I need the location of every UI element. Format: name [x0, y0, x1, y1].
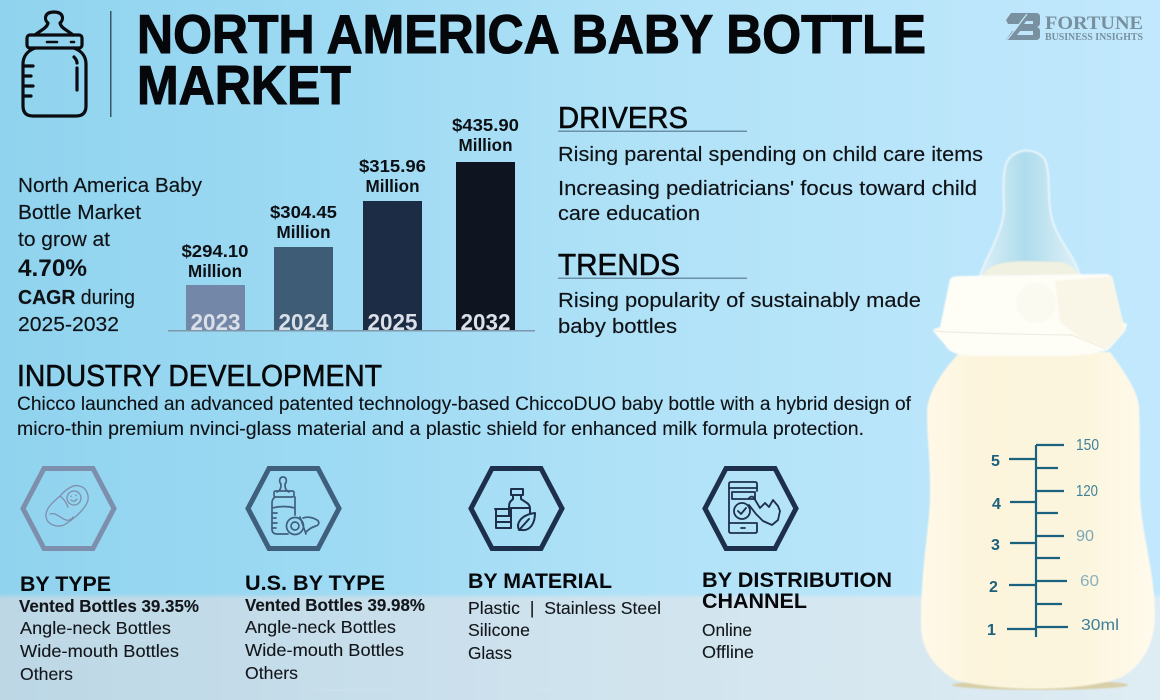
- segment list: [702, 620, 754, 662]
- bar 2025: [359, 156, 426, 335]
- segment list: Glass: [468, 643, 512, 663]
- text block: market summary: CAGR during: [18, 287, 135, 309]
- heading: [702, 569, 892, 613]
- bar 2023: Million: [188, 261, 242, 281]
- text block: market summary: Bottle Market: [18, 202, 141, 224]
- measurement scale: 60: [1080, 573, 1099, 590]
- nipple: [980, 151, 1080, 276]
- panel: drivers: Increasing pediatricians' focus toward child: [558, 178, 977, 200]
- segment list: Vented Bottles 39.35%: [19, 596, 199, 616]
- measurement scale: 1: [987, 622, 996, 639]
- panel: drivers: care education: [558, 203, 700, 225]
- panel: drivers: [558, 100, 983, 225]
- text block: market summary: [18, 175, 202, 336]
- bottle shadow: [952, 680, 1128, 690]
- bar 2023: [182, 241, 249, 335]
- heading: BY TYPE: [20, 573, 111, 596]
- icon: swaddled baby hexagon: [23, 468, 114, 548]
- bar 2024: [270, 202, 337, 335]
- bar 2023: 2023: [190, 309, 240, 335]
- bottle body: [921, 352, 1155, 689]
- text block: market summary: 4.70%: [18, 255, 87, 282]
- measurement scale: 150: [1076, 437, 1099, 454]
- panel: industry development: INDUSTRY DEVELOPMENT: [17, 358, 382, 393]
- icon: materials hexagon: [471, 468, 562, 548]
- measurement scale: 4: [992, 496, 1001, 513]
- segment list: Wide-mouth Bottles: [20, 641, 179, 661]
- segment list: [245, 595, 425, 683]
- bar 2032: $435.90: [452, 115, 519, 135]
- segment list: Wide-mouth Bottles: [245, 640, 404, 660]
- measurement scale: [987, 437, 1119, 639]
- divider: [110, 11, 112, 117]
- bar 2032: [452, 115, 519, 335]
- bar 2025: 2025: [368, 309, 418, 335]
- panel: industry development: [17, 358, 912, 440]
- icon: phone ordering hexagon: [705, 468, 796, 548]
- text block: market summary: 2025-2032: [18, 314, 119, 336]
- bar 2032: Million: [458, 135, 512, 155]
- panel: industry development: micro-thin premium nvinci-glass material and a plastic shield for enhanced milk formula protection.: [17, 419, 864, 440]
- bottle cap: [933, 274, 1127, 356]
- icon: baby bottle: [23, 12, 86, 116]
- measurement scale: 3: [991, 537, 1000, 554]
- measurement scale: 120: [1076, 483, 1098, 500]
- text block: market summary: North America Baby: [18, 175, 202, 197]
- bar 2032: 2032: [460, 309, 510, 335]
- panel: trends: Rising popularity of sustainably made: [558, 290, 921, 312]
- panel: by type: [19, 468, 199, 684]
- bar chart: [168, 115, 535, 335]
- segment list: Plastic | Stainless Steel: [468, 598, 661, 618]
- segment list: Angle-neck Bottles: [20, 618, 171, 638]
- panel: trends: baby bottles: [558, 316, 677, 338]
- panel: trends: [558, 247, 921, 338]
- panel: trends: TRENDS: [558, 247, 680, 282]
- panel: industry development: Chicco launched an advanced patented technology-based ChiccoDUO baby bottle with a hybrid design of: [17, 394, 912, 415]
- segment list: Angle-neck Bottles: [245, 617, 396, 637]
- heading: BY DISTRIBUTION: [702, 569, 892, 592]
- bar 2023: $294.10: [182, 241, 249, 261]
- measurement scale: 30ml: [1081, 617, 1119, 634]
- title: NORTH AMERICA BABY BOTTLE: [137, 3, 926, 65]
- segment list: Others: [20, 664, 73, 684]
- segment list: Others: [245, 663, 298, 683]
- logo: Fortune Business Insights: [1006, 13, 1143, 43]
- measurement scale: 90: [1076, 528, 1094, 545]
- panel: by distribution channel: [702, 468, 892, 662]
- segment list: Silicone: [468, 620, 530, 640]
- heading: BY MATERIAL: [468, 570, 612, 593]
- icon: bottle and pacifier hexagon: [248, 468, 339, 548]
- segment list: [19, 596, 199, 684]
- heading: U.S. BY TYPE: [245, 572, 385, 595]
- logo: Fortune Business Insights: BUSINESS INSIGHTS: [1045, 32, 1143, 43]
- bar 2024: 2024: [278, 309, 329, 335]
- segment list: Vented Bottles 39.98%: [245, 595, 425, 615]
- bar 2025: Million: [366, 176, 420, 196]
- panel: U.S. by type: [245, 468, 425, 683]
- title: MARKET: [137, 54, 351, 116]
- segment list: Offline: [702, 642, 754, 662]
- segment list: [468, 598, 661, 663]
- illustration: baby bottle photo: [921, 151, 1155, 690]
- bar 2025: $315.96: [359, 156, 426, 176]
- panel: drivers: Rising parental spending on child care items: [558, 144, 983, 166]
- bar 2024: Million: [276, 222, 330, 242]
- measurement scale: 5: [991, 453, 1000, 470]
- text block: market summary: to grow at: [18, 229, 110, 251]
- logo: Fortune Business Insights: FORTUNE: [1045, 13, 1143, 34]
- segment list: Online: [702, 620, 752, 640]
- title: [137, 3, 926, 116]
- measurement scale: 2: [989, 579, 998, 596]
- bar 2024: $304.45: [270, 202, 337, 222]
- panel: by material: [468, 468, 661, 663]
- panel: drivers: DRIVERS: [558, 100, 688, 135]
- heading: CHANNEL: [702, 590, 807, 613]
